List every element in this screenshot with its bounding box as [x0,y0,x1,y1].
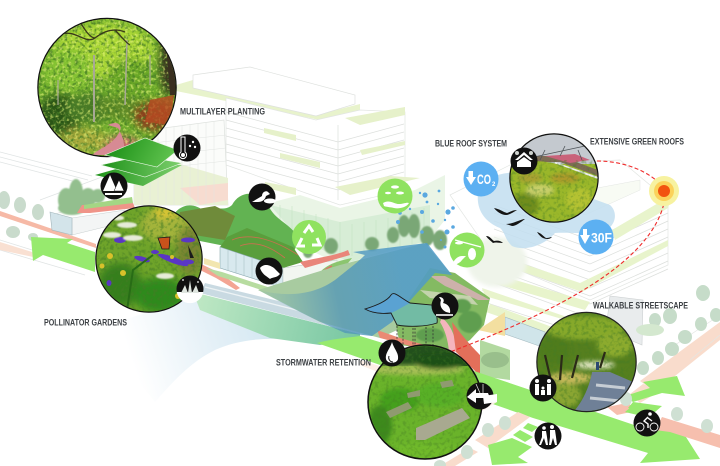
icon: bird on nest [248,184,276,210]
icon: CO2 [464,162,498,196]
birds [486,208,552,243]
photo: extensive green roof [510,134,600,224]
icon: walkers [534,422,562,450]
green roof terrace [176,80,360,120]
icon: green hand with leaves [378,178,412,214]
road grey strip [200,283,360,334]
left planted building [0,179,135,241]
glass atrium light green [262,175,445,265]
central green strip [193,292,360,345]
icon: CO2: CO [477,171,491,187]
icon: thermometer [174,134,200,162]
context streets left [0,152,124,275]
right context trees and roads [636,285,720,392]
label: blue roof system: BLUE ROOF SYSTEM [435,138,507,150]
label: extensive green roofs: EXTENSIVE GREEN ROOFS [590,136,684,148]
under arrow muted site [258,243,452,338]
icon: 30F: 30F [591,230,612,246]
layers icon: stacked green planes [95,138,182,186]
icon: 30F [578,220,614,254]
salmon walkways lower [360,360,720,466]
green street band [317,336,700,463]
tower right [450,160,672,336]
label: walkable streetscape: WALKABLE STREETSCAPE [593,300,688,312]
photo: stormwater retention [365,345,482,460]
icon: family [530,374,556,402]
crosswalk arrow bottom [488,423,538,465]
icon: water drop [378,340,406,366]
photo: pollinator gardens [96,206,204,313]
icon: cyclist [634,410,660,436]
building: main tower [176,67,420,205]
water droplets [396,190,455,248]
lower garden right of arrow [377,268,510,380]
glass building [134,120,228,205]
crosswalk arrow top right [625,376,685,416]
label: multilayer planting: MULTILAYER PLANTING [180,106,265,118]
lower street trees [434,392,713,466]
salmon sidewalk left [0,211,240,290]
icon: green recycle [292,220,326,254]
grey annex [478,296,643,348]
icon: CO2: 2 [492,182,496,188]
icon: reeds and arrow [466,382,497,410]
icon: green branch with seed [450,232,484,268]
photo: walkable streetscape [537,312,640,415]
blue fade plaza [108,298,345,402]
roof gardens centre [170,194,352,296]
blue arrow [258,243,452,336]
icon: trees [100,172,128,200]
icon: grass [176,276,204,303]
photo: multilayer planting forest [38,18,177,157]
label: stormwater retention: STORMWATER RETENTION [276,358,371,368]
icon: heron [432,292,458,320]
left green arrow [31,237,95,272]
icon: green roof house [510,148,538,174]
blue cloud [478,172,615,248]
pond diagram [365,294,437,346]
white sail tree [467,237,527,287]
penthouse [193,67,355,116]
green trees behind blue arrow [303,214,447,258]
label: pollinator gardens: POLLINATOR GARDENS [44,318,127,328]
dashed red connector [450,161,665,352]
sun marker [649,176,679,206]
icon: frog [256,258,282,284]
